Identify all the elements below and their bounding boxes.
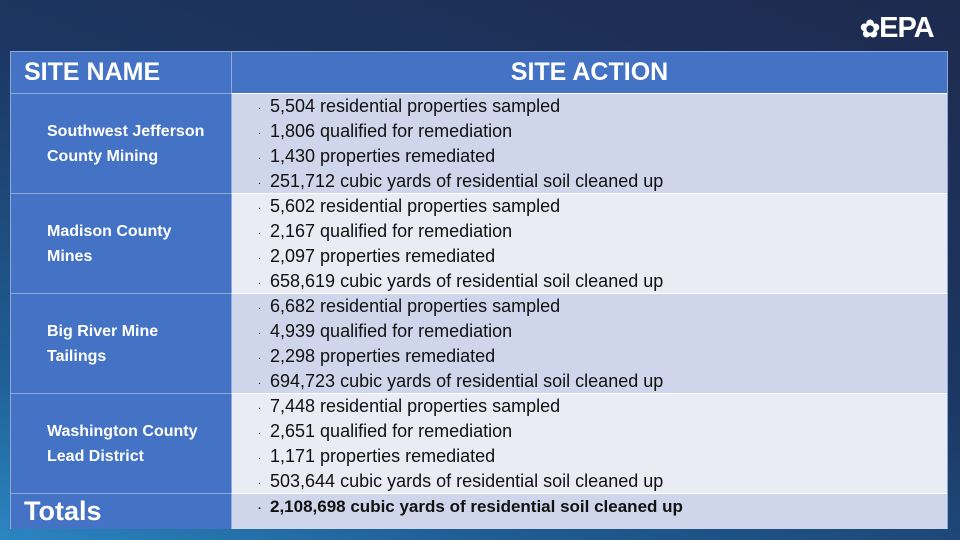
row 4 actions: 2,651 qualified for remediation	[270, 421, 512, 441]
row 3 actions: 4,939 qualified for remediation	[270, 321, 512, 341]
row 2 actions: .	[258, 250, 261, 262]
row 3 actions: .	[258, 300, 261, 312]
row 4 actions: .	[258, 425, 261, 437]
totals value	[231, 494, 947, 529]
row 3 name: Tailings	[47, 348, 106, 365]
header: site action: SITE ACTION	[511, 58, 668, 86]
row 3 name: Big River Mine	[47, 323, 158, 340]
row 3 actions: 6,682 residential properties sampled	[270, 296, 560, 316]
row 4 name: Washington County	[47, 423, 198, 440]
row 2 name	[11, 194, 231, 294]
row 3 actions: 694,723 cubic yards of residential soil cleaned up	[270, 371, 663, 391]
totals label: Totals	[24, 496, 102, 526]
row 1 actions: .	[258, 175, 261, 187]
row 4 actions: .	[258, 475, 261, 487]
row 4 name: Lead District	[47, 448, 144, 465]
totals label	[11, 494, 231, 529]
row 1 name: Southwest Jefferson	[47, 123, 204, 140]
row 3 actions	[231, 294, 947, 394]
row 4 name	[11, 394, 231, 494]
row 4 actions: 7,448 residential properties sampled	[270, 396, 560, 416]
row 4 actions: .	[258, 400, 261, 412]
row 1 actions: 1,806 qualified for remediation	[270, 121, 512, 141]
row 2 actions: .	[258, 225, 261, 237]
row 2 name: Madison County	[47, 223, 171, 240]
row 3 name	[11, 294, 231, 394]
row 1 actions: .	[258, 125, 261, 137]
row 2 actions: .	[258, 200, 261, 212]
row 1 name	[11, 94, 231, 194]
row 4 actions	[231, 394, 947, 494]
row 1 actions: .	[258, 100, 261, 112]
header: site name	[11, 52, 231, 94]
row 2 actions: 658,619 cubic yards of residential soil cleaned up	[270, 271, 663, 291]
totals value: 2,108,698 cubic yards of residential soil cleaned up	[270, 497, 683, 516]
row 1 actions: 1,430 properties remediated	[270, 146, 495, 166]
row 3 actions: .	[258, 375, 261, 387]
row 2 actions: 2,097 properties remediated	[270, 246, 495, 266]
row 3 actions: 2,298 properties remediated	[270, 346, 495, 366]
row 2 actions	[231, 194, 947, 294]
row 1 actions: .	[258, 150, 261, 162]
header: site name: SITE NAME	[24, 58, 160, 86]
row 4 actions: 1,171 properties remediated	[270, 446, 495, 466]
row 2 actions: 5,602 residential properties sampled	[270, 196, 560, 216]
row 2 actions: 2,167 qualified for remediation	[270, 221, 512, 241]
header: site action	[231, 52, 947, 94]
row 2 name: Mines	[47, 248, 92, 265]
row 4 actions: 503,644 cubic yards of residential soil cleaned up	[270, 471, 663, 491]
row 3 actions: .	[258, 350, 261, 362]
row 2 actions: .	[258, 275, 261, 287]
totals value: .	[258, 500, 261, 512]
row 1 actions: 5,504 residential properties sampled	[270, 96, 560, 116]
row 1 name: County Mining	[47, 148, 158, 165]
row 1 actions	[231, 94, 947, 194]
logo: EPA: ✿EPA	[860, 12, 934, 44]
row 3 actions: .	[258, 325, 261, 337]
row 1 actions: 251,712 cubic yards of residential soil cleaned up	[270, 171, 663, 191]
row 4 actions: .	[258, 450, 261, 462]
